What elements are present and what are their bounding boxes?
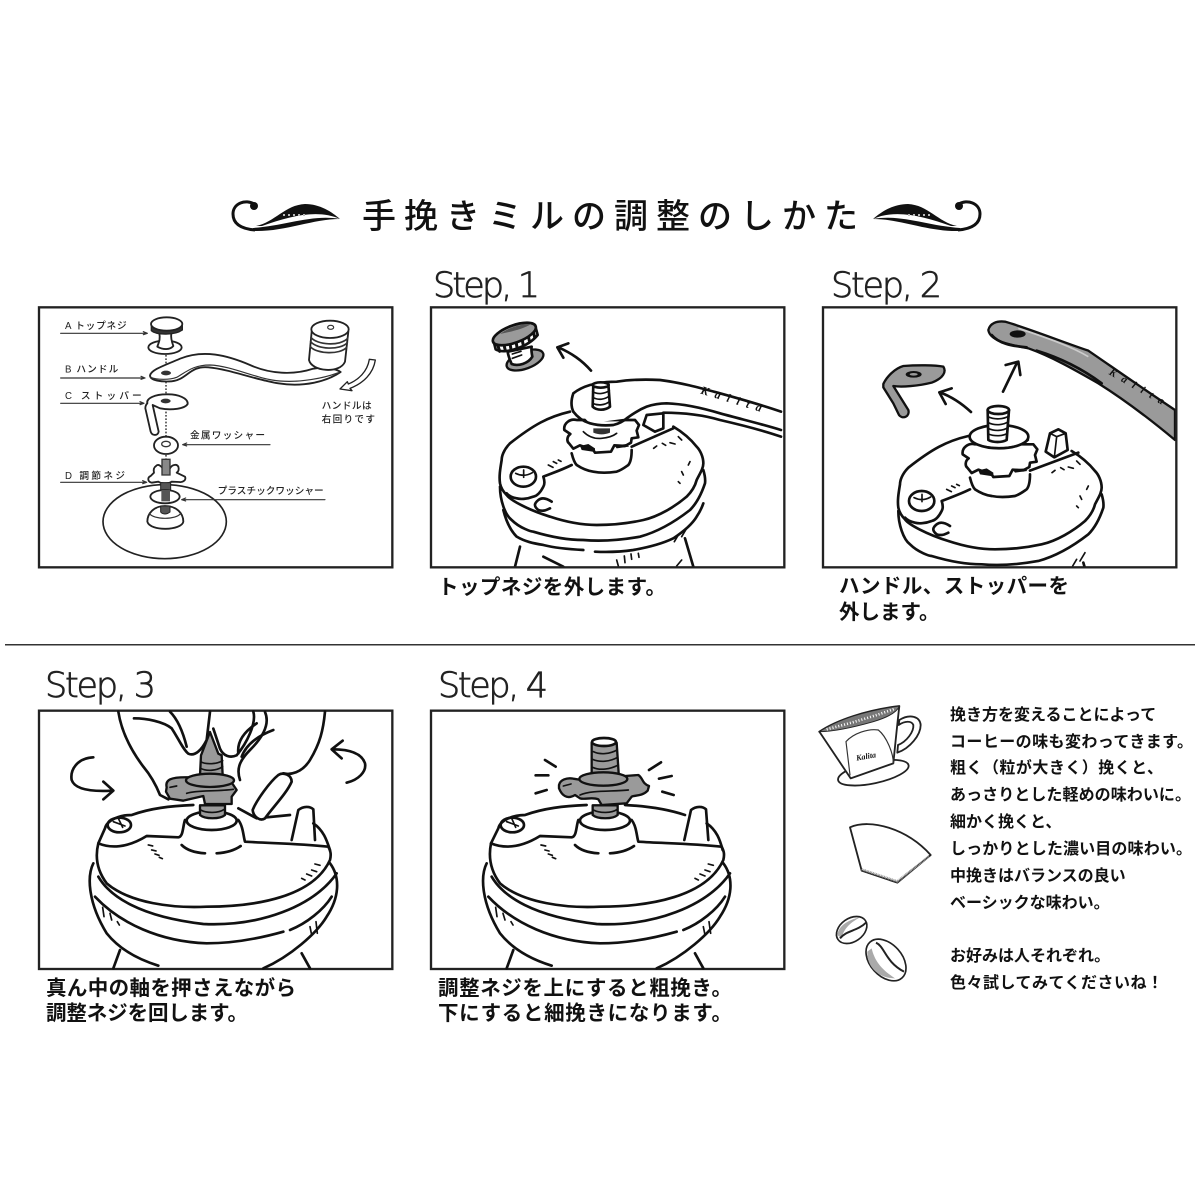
caption line 2: 下にすると細挽きになります。	[438, 1002, 732, 1025]
parts frame	[39, 307, 392, 567]
caption: step 4	[438, 977, 732, 1025]
line 7: 中挽きはバランスの良い	[950, 866, 1126, 885]
line 6: しっかりとした濃い目の味わい。	[950, 840, 1192, 858]
step 4 heading: Step, 4	[438, 666, 548, 706]
plate with screw	[507, 465, 572, 511]
handle arm: Kalita	[698, 383, 764, 415]
adjusting gear	[559, 772, 649, 805]
part label: D adjusting screw	[61, 470, 147, 484]
ornament: right flourish	[873, 202, 980, 231]
line 5: 細かく挽くと、	[950, 813, 1061, 831]
handle rotation note: ハンドルは	[322, 401, 372, 412]
part D: adjusting screw	[148, 459, 185, 483]
step 4 frame	[431, 711, 784, 969]
part C: stopper	[145, 394, 188, 435]
removed handle: Kalita	[1106, 367, 1166, 408]
hands	[118, 712, 325, 799]
panel: step 1	[431, 307, 784, 567]
line 2: コーヒーの味も変わってきます。	[950, 732, 1193, 751]
explanatory text block	[950, 705, 1193, 992]
caption: step 1: トップネジを外します。	[438, 576, 666, 599]
step 3 heading: Step, 3	[45, 666, 156, 706]
title with ornaments	[233, 198, 980, 236]
icon: paper filter	[850, 824, 931, 883]
motion marks left	[536, 760, 556, 793]
removed stopper	[883, 365, 945, 417]
caption: step 3	[46, 976, 296, 1025]
line 1: 挽き方を変えることによって	[950, 705, 1156, 724]
adjusting gear	[564, 420, 639, 453]
spacer tab	[632, 413, 673, 447]
threaded stud	[592, 738, 619, 778]
line 9: お好みは人それぞれ。	[950, 946, 1110, 965]
panel: step 3	[39, 711, 392, 969]
step 3 frame	[39, 711, 392, 969]
caption line 2: 調整ネジを回します。	[46, 1002, 248, 1025]
section divider	[5, 644, 1195, 646]
grinder body	[896, 434, 1105, 566]
handle arm	[570, 380, 781, 437]
arrow: top screw removal	[557, 343, 591, 371]
grinder body	[500, 412, 705, 567]
base circle with plastic washer	[103, 483, 226, 559]
panel: step 4	[431, 711, 784, 969]
line 10: 色々試してみてくださいね！	[950, 973, 1163, 992]
part A: top screw	[148, 317, 182, 354]
handle knob cup	[309, 321, 349, 370]
spacer tab and plate edge	[1030, 429, 1078, 471]
step 2 frame	[823, 307, 1176, 567]
removed top screw	[490, 318, 546, 375]
grinder body	[483, 820, 730, 968]
motion marks right	[649, 762, 674, 795]
icon: coffee beans	[831, 911, 914, 989]
part label: plastic washer: プラスチックワッシャー	[218, 486, 324, 497]
coffee illustrations	[819, 706, 931, 989]
arrow: stopper removal	[939, 388, 971, 412]
caption line 2: 外します。	[839, 601, 939, 624]
dotted centre axis	[164, 355, 168, 460]
line 3: 粗く（粒が大きく）挽くと、	[950, 758, 1163, 777]
centre boss	[580, 805, 630, 830]
part label: B handle: B ハンドル	[65, 364, 119, 375]
caption line 1: 調整ネジを上にすると粗挽き。	[438, 977, 732, 1000]
heading text: 手挽きミルの調整のしかた	[362, 198, 858, 236]
part label: D adjusting screw: D 調節ネジ	[65, 470, 125, 482]
removed handle	[988, 321, 1175, 440]
icon: dripper	[819, 706, 921, 791]
line 4: あっさりとした軽めの味わいに。	[950, 786, 1191, 804]
washer and threaded stud	[970, 406, 1028, 448]
handle rotation note line 2: 右回りです	[322, 413, 375, 425]
rotation arrow	[340, 359, 375, 391]
threaded stud	[593, 382, 610, 410]
icon: dripper: Kalita	[854, 750, 877, 763]
line 8: ベーシックな味わい。	[950, 894, 1110, 912]
caption line 1: 真ん中の軸を押さえながら	[46, 976, 296, 1000]
threaded stud	[200, 732, 223, 775]
part label: A top screw	[61, 321, 147, 335]
metal washer	[154, 437, 178, 454]
arrow: counter-clockwise left	[71, 757, 113, 799]
grinder body	[90, 820, 337, 968]
part B: handle	[150, 354, 341, 385]
centre boss	[572, 450, 632, 473]
part label: metal washer: 金属ワッシャー	[190, 429, 265, 441]
panel: parts diagram	[39, 307, 392, 567]
caption: step 2	[839, 575, 1069, 624]
part label: A top screw: A トップネジ	[65, 321, 127, 332]
centre boss	[970, 474, 1030, 497]
part label: metal washer	[183, 429, 270, 446]
adjusting gear	[166, 774, 237, 804]
arrow: handle removal	[1003, 362, 1020, 392]
part label: B handle	[61, 364, 145, 379]
plate with screw	[98, 805, 330, 850]
step 1 heading: Step, 1	[433, 266, 540, 306]
ornament: left flourish	[233, 202, 340, 231]
part label: C stopper: C ストッパー	[65, 391, 142, 402]
plate with screw	[491, 805, 723, 850]
adjusting gear	[963, 444, 1037, 477]
step 2 heading: Step, 2	[831, 266, 942, 306]
plate with screw	[905, 489, 970, 535]
caption line 1: ハンドル、ストッパーを	[839, 575, 1069, 598]
pressing finger	[253, 774, 292, 819]
step 1 frame	[431, 307, 784, 567]
centre boss	[187, 805, 237, 830]
panel: step 2	[823, 307, 1176, 591]
arrow: clockwise right	[332, 741, 365, 783]
